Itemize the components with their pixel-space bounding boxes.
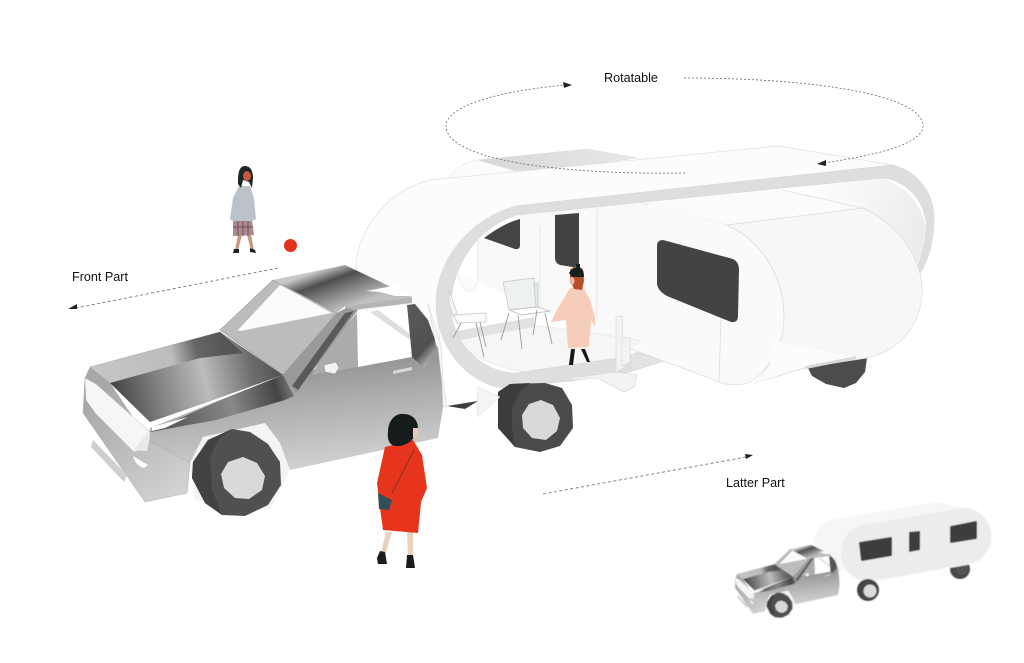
side window: [357, 305, 412, 367]
mini truck and trailer: [735, 502, 996, 618]
front wheel: [192, 429, 281, 516]
headlight block: [85, 378, 150, 452]
capsule sky gap: [660, 190, 870, 225]
figure: child in grey sweater: [230, 166, 256, 253]
interior pale curve: [458, 275, 478, 292]
front wheel hub: [221, 457, 265, 499]
rear trailer wheel: [807, 358, 867, 388]
mirror: [324, 362, 339, 374]
ball: [284, 239, 297, 252]
side panel inside window: [312, 313, 358, 375]
trailer back hump: [449, 149, 637, 190]
rear trailer capsule: [631, 190, 922, 385]
truck rear chassis: [447, 387, 500, 417]
label: Rotatable: Rotatable: [604, 71, 658, 85]
under-trailer strip: [631, 353, 664, 370]
trailer right rear shell: [800, 178, 927, 274]
capsule front face: [631, 204, 784, 385]
chair, right: [501, 278, 552, 349]
floor back strip: [451, 317, 534, 341]
windshield: [220, 280, 337, 375]
front part arrow: [68, 268, 278, 309]
capsule window: [657, 240, 739, 322]
windshield glass: [238, 285, 332, 331]
hood: [90, 332, 283, 422]
door handle: [393, 367, 412, 374]
hump white end: [449, 160, 520, 190]
door panel outline: [348, 395, 442, 455]
interior window: [484, 219, 520, 249]
rotation arrowheads: [563, 82, 826, 166]
mini truck: [735, 545, 841, 618]
capsule rear body: [727, 208, 922, 383]
mini rear axle wheel: [857, 579, 879, 601]
figure: woman in red coat: [377, 414, 427, 568]
trailer interior: [450, 200, 670, 373]
label: Front Part: Front Part: [72, 270, 128, 284]
trailer outer shell: [356, 146, 893, 350]
grille lower: [91, 440, 127, 482]
truck: [83, 265, 447, 516]
label: Latter Part: Latter Part: [726, 476, 785, 490]
figure: woman in pink coat: [551, 264, 595, 365]
fold-out step: [572, 316, 637, 392]
capsule underside: [755, 340, 852, 383]
truck front: [83, 367, 190, 502]
interior door: [555, 213, 579, 268]
fender stripe: [150, 375, 294, 432]
mini trailer body: [836, 503, 996, 586]
mini window left: [860, 538, 891, 560]
mini door: [909, 531, 920, 552]
mini window right: [951, 522, 976, 542]
latter part arrow: [543, 454, 753, 494]
interior back wall: [450, 200, 670, 373]
hood top shading: [90, 332, 243, 383]
capsule side wall: [631, 190, 780, 382]
truck body side: [145, 348, 443, 502]
second truck wheel: [498, 383, 573, 452]
mini trailer back: [813, 502, 977, 570]
hump grey top: [478, 149, 637, 172]
roof: [273, 265, 412, 313]
rotation arrow, dashed ellipse: [446, 78, 923, 173]
A pillar: [283, 308, 358, 393]
rear pillar: [407, 304, 438, 368]
roof edge: [345, 297, 412, 312]
wheel arch: [190, 423, 290, 510]
view through window: [370, 310, 410, 340]
ring frame of trailer: [436, 165, 934, 388]
floor: [455, 325, 640, 372]
mini wheel rear: [950, 559, 970, 579]
chair, left: [449, 290, 486, 357]
